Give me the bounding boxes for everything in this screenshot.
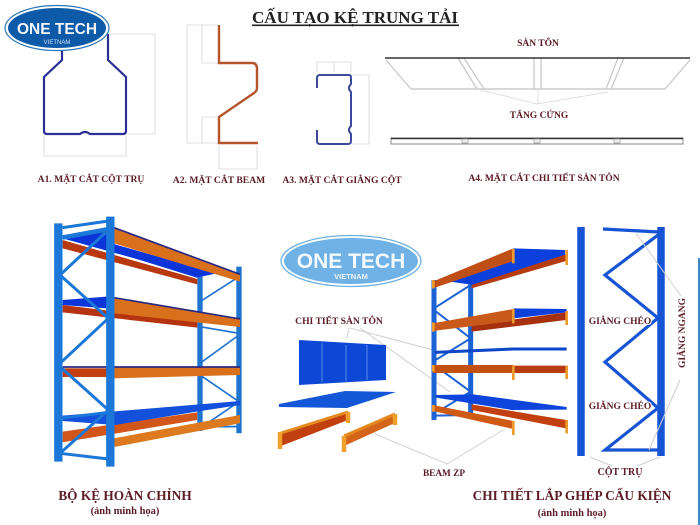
illustration: upright frame (581, 227, 661, 456)
diagram: A1 column section (44, 34, 155, 156)
logo: One Tech top: VIETNAM (44, 40, 70, 46)
shelf level 4 (63, 401, 240, 447)
shelf 1 (433, 248, 567, 288)
shelf 3 (435, 349, 567, 352)
caption: assembly detail: CHI TIẾT LẮP GHÉP CẤU KIỆN (473, 488, 672, 503)
label: brace 2: GIẰNG CHÉO (589, 399, 651, 412)
logo: One Tech top (5, 6, 109, 50)
label: column: CỘT TRỤ (598, 465, 642, 478)
part: deck flat (279, 391, 396, 408)
shelf level 1 (63, 228, 240, 284)
shelf 4 (433, 365, 567, 380)
illustration: complete rack (58, 217, 240, 467)
caption: A1: A1. MẶT CẮT CỘT TRỤ (38, 172, 144, 185)
illustration: rack assembly (433, 248, 567, 435)
caption: complete rack: (ảnh minh họa) (91, 506, 160, 517)
logo: One Tech top: ONE TECH (17, 21, 97, 38)
logo: One Tech center: VIETNAM (334, 272, 368, 281)
diagram: A4 deck section (385, 58, 690, 144)
label: deck detail: CHI TIẾT SÀN TÔN (295, 314, 383, 327)
label: brace 1: GIẰNG CHÉO (589, 314, 651, 327)
illustration: deck and beam parts (279, 340, 396, 452)
label: horizontal brace: GIẰNG NGANG (675, 297, 688, 368)
label: Tang cung: TĂNG CỨNG (510, 109, 569, 121)
caption: A3: A3. MẶT CẮT GIẰNG CỘT (282, 173, 402, 186)
caption: complete rack: BỘ KỆ HOÀN CHỈNH (58, 488, 192, 503)
shelf 5 (433, 394, 567, 435)
logo: One Tech center (281, 236, 421, 286)
caption: A2: A2. MẶT CẮT BEAM (173, 173, 265, 186)
label: San ton: SÀN TÔN (517, 36, 559, 49)
part: beam left (280, 411, 348, 449)
caption: complete rack (58, 488, 192, 517)
caption: A4: A4. MẶT CẮT CHI TIẾT SÀN TÔN (468, 171, 620, 184)
label: beam: BEAM ZP (423, 469, 465, 479)
part: deck vertical (299, 340, 386, 385)
leader lines: frame (590, 232, 681, 466)
logo: One Tech center: ONE TECH (297, 250, 405, 273)
diagram: A3 brace section (317, 62, 370, 144)
shelf 2 (433, 308, 567, 332)
right edge line (698, 258, 700, 525)
title: CẤU TẠO KỆ TRUNG TẢI (252, 8, 458, 27)
diagram: A2 beam section (187, 25, 258, 169)
frame (434, 280, 471, 420)
shelf level 2 (63, 297, 240, 328)
leader lines: deck detail (347, 328, 450, 392)
shelf level 3 (63, 367, 240, 378)
leader lines: beam (375, 430, 503, 464)
caption: assembly detail (473, 488, 672, 519)
back frame (200, 267, 239, 433)
front frame (58, 217, 110, 467)
part: beam right (344, 414, 395, 452)
caption: assembly detail: (ảnh minh họa) (538, 508, 607, 519)
